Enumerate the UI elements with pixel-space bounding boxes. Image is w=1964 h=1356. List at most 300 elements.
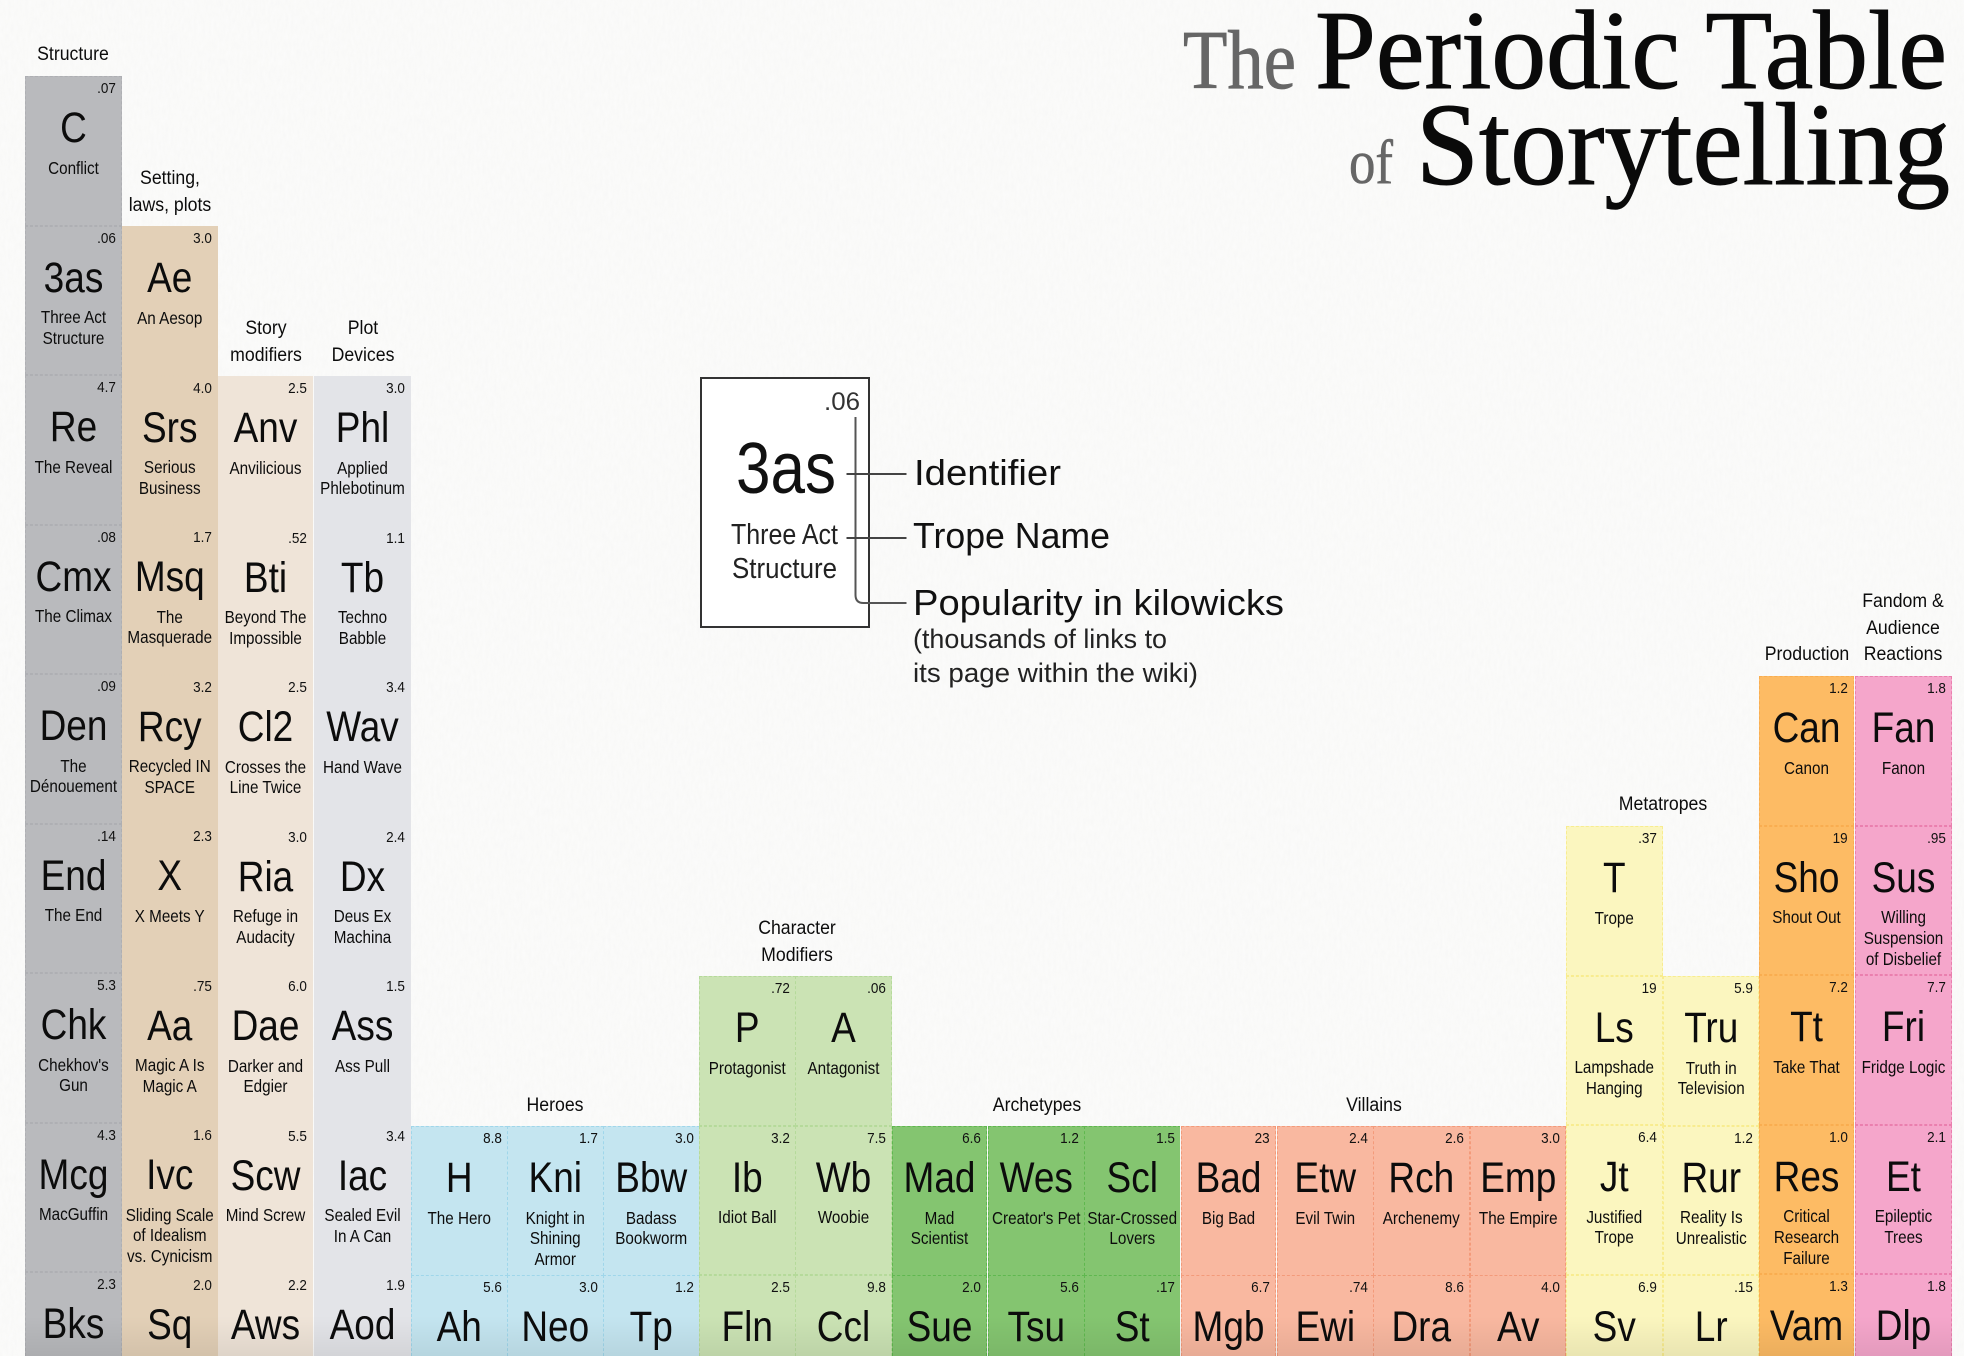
- element: Fln: 2.5: [771, 1279, 790, 1296]
- element: Critical Research Failure: 1.0: [1829, 1128, 1848, 1146]
- element: Idiot Ball: 3.2: [771, 1130, 790, 1146]
- element: Willing Suspension of Disbelief: [1855, 826, 1952, 975]
- element: Lr: [1662, 1275, 1759, 1356]
- element: The Empire: The Empire: [1478, 1208, 1557, 1228]
- element: Shout Out: Shout Out: [1772, 907, 1841, 927]
- element: MacGuffin: Mcg: [39, 1150, 108, 1198]
- element: Archenemy: [1373, 1126, 1470, 1276]
- element: Sq: Sq: [147, 1300, 192, 1348]
- element: Ah: [411, 1275, 508, 1356]
- heading: Story modifiers: [230, 318, 302, 366]
- element: Dlp: Dlp: [1876, 1302, 1931, 1350]
- element: An Aesop: Ae: [147, 254, 192, 302]
- element: Fridge Logic: Fridge Logic: [1862, 1056, 1945, 1076]
- element: Evil Twin: Evil Twin: [1295, 1208, 1355, 1228]
- element: Sliding Scale of Idealism vs. Cynicism: Sliding Scale: [126, 1204, 214, 1224]
- heading: Story modifiers: modifiers: [230, 345, 302, 366]
- element: Trope: [1566, 826, 1662, 976]
- element: Beyond The Impossible: [218, 526, 313, 675]
- element: Aod: Aod: [330, 1301, 395, 1349]
- element: Critical Research Failure: Critical: [1783, 1206, 1830, 1226]
- element: X Meets Y: 2.3: [193, 828, 212, 845]
- element: Hand Wave: Wav: [326, 703, 399, 751]
- heading: Fandom & Audience Reactions: Fandom &: [1862, 591, 1944, 612]
- element: Hand Wave: [314, 675, 411, 824]
- legend: how to read an element: 3as: [736, 429, 836, 509]
- element: Willing Suspension of Disbelief: Sus: [1872, 854, 1935, 902]
- element: The Dénouement: The: [60, 756, 87, 776]
- element: Beyond The Impossible: Impossible: [229, 628, 302, 648]
- element: Big Bad: Bad: [1196, 1154, 1261, 1202]
- element: Ass Pull: 1.5: [386, 978, 405, 995]
- element: Mad Scientist: Scientist: [911, 1228, 968, 1248]
- element: Sue: 2.0: [962, 1279, 981, 1296]
- element: Star-Crossed Lovers: Scl: [1107, 1154, 1158, 1202]
- element: Neo: Neo: [521, 1303, 589, 1351]
- legend: how to read an element: Trope Name: [913, 515, 1110, 556]
- element: Lampshade Hanging: 19: [1641, 980, 1656, 996]
- panel: Heroes group: [411, 1126, 699, 1356]
- element: Beyond The Impossible: Beyond The: [225, 607, 306, 627]
- element: Truth in Television: Truth in: [1685, 1058, 1736, 1078]
- element: Anvilicious: [218, 376, 313, 526]
- element: Darker and Edgier: 6.0: [288, 978, 307, 995]
- element: Vam: 1.3: [1829, 1278, 1848, 1295]
- element: Applied Phlebotinum: Phlebotinum: [320, 478, 405, 498]
- element: The Climax: [25, 524, 122, 674]
- element: Antagonist: A: [831, 1004, 856, 1052]
- element: Ccl: [795, 1275, 892, 1356]
- element: The Hero: H: [446, 1154, 473, 1202]
- element: Take That: 7.2: [1829, 979, 1848, 996]
- element: Ah: 5.6: [483, 1279, 502, 1296]
- heading: Fandom & Audience Reactions: Reactions: [1864, 644, 1942, 665]
- element: Fanon: 1.8: [1927, 680, 1946, 697]
- element: Lampshade Hanging: Ls: [1595, 1004, 1634, 1052]
- element: Mad Scientist: Mad: [925, 1208, 954, 1228]
- element: The Empire: 3.0: [1541, 1130, 1560, 1147]
- element: Woobie: 7.5: [867, 1130, 886, 1146]
- legend: how to read an element: Popularity in kilowicks: [913, 582, 1284, 623]
- legend: how to read an element: Structure: [732, 553, 837, 585]
- element: Tsu: [988, 1275, 1084, 1356]
- element: Canon: Can: [1773, 704, 1840, 752]
- element: Techno Babble: Techno: [338, 607, 387, 627]
- element: Darker and Edgier: Edgier: [243, 1076, 288, 1096]
- element: The Climax: .08: [97, 528, 116, 546]
- element: Justified Trope: Jt: [1600, 1153, 1629, 1201]
- element: Critical Research Failure: Res: [1774, 1152, 1839, 1200]
- legend: how to read an element: its page within the wiki): [913, 658, 1198, 688]
- element: Applied Phlebotinum: Applied: [337, 458, 388, 478]
- element: Dra: 8.6: [1445, 1279, 1464, 1296]
- element: Refuge in Audacity: Refuge in: [233, 906, 298, 926]
- element: Lampshade Hanging: [1566, 976, 1662, 1125]
- element: St: [1084, 1275, 1180, 1356]
- element: Aws: Aws: [231, 1301, 300, 1349]
- element: Recycled IN SPACE: 3.2: [193, 678, 212, 696]
- element: An Aesop: 3.0: [193, 230, 212, 247]
- element: Knight in Shining Armor: Knight in: [526, 1208, 585, 1228]
- element: Reality Is Unrealistic: 1.2: [1734, 1130, 1753, 1146]
- element: Justified Trope: Justified: [1586, 1206, 1642, 1226]
- element: Truth in Television: Television: [1677, 1078, 1744, 1098]
- legend: how to read an element: .06: [824, 388, 860, 416]
- element: Fridge Logic: [1855, 975, 1952, 1124]
- element: Creator's Pet: [988, 1126, 1084, 1276]
- element: Mind Screw: [218, 1124, 313, 1273]
- element: Dlp: 1.8: [1927, 1278, 1946, 1295]
- element: Sealed Evil In A Can: [314, 1124, 411, 1273]
- element: Deus Ex Machina: Deus Ex: [334, 906, 391, 926]
- element: Aod: [314, 1273, 411, 1356]
- element: Deus Ex Machina: [314, 824, 411, 974]
- element: Sv: 6.9: [1638, 1279, 1656, 1296]
- element: Creator's Pet: Wes: [1000, 1154, 1073, 1202]
- element: Ewi: .74: [1349, 1279, 1368, 1296]
- element: Conflict: Conflict: [48, 158, 99, 178]
- element: Bks: Bks: [43, 1300, 104, 1348]
- element: Protagonist: P: [735, 1004, 760, 1052]
- element: Beyond The Impossible: .52: [288, 530, 307, 546]
- element: Critical Research Failure: Research: [1774, 1227, 1839, 1247]
- panel: Villains group: [1181, 1126, 1566, 1356]
- element: Willing Suspension of Disbelief: Willing: [1881, 907, 1926, 927]
- element: Reality Is Unrealistic: Unrealistic: [1675, 1228, 1746, 1248]
- element: Three Act Structure: 3as: [44, 254, 103, 302]
- heading: Character Modifiers: Character: [758, 918, 836, 939]
- heading: Setting, laws, plots: [129, 168, 211, 216]
- element: Serious Business: 4.0: [193, 380, 212, 396]
- element: Epileptic Trees: Et: [1886, 1152, 1921, 1200]
- element: Magic A Is Magic A: Magic A Is: [135, 1055, 204, 1075]
- element: Badass Bookworm: 3.0: [675, 1130, 694, 1147]
- legend: how to read an element: [700, 377, 1284, 688]
- element: Darker and Edgier: Dae: [232, 1002, 299, 1050]
- element: Badass Bookworm: Badass: [626, 1208, 677, 1228]
- element: St: St: [1115, 1303, 1150, 1351]
- heading: Structure: Structure: [37, 44, 109, 65]
- element: Sliding Scale of Idealism vs. Cynicism: [122, 1123, 218, 1272]
- element: Badass Bookworm: [603, 1126, 700, 1276]
- element: Take That: Take That: [1773, 1056, 1840, 1076]
- element: Three Act Structure: .06: [97, 230, 116, 246]
- element: The Climax: Cmx: [35, 552, 112, 600]
- element: Star-Crossed Lovers: [1084, 1126, 1180, 1276]
- element: Justified Trope: [1566, 1125, 1662, 1274]
- element: Magic A Is Magic A: [122, 974, 218, 1123]
- element: Antagonist: Antagonist: [808, 1058, 879, 1078]
- element: Mind Screw: Mind Screw: [226, 1205, 305, 1225]
- panel: Production column: [1759, 676, 1854, 1356]
- element: Deus Ex Machina: Dx: [340, 852, 385, 900]
- panel: Story modifiers column: [218, 376, 313, 1356]
- element: Sue: [892, 1275, 987, 1356]
- element: Truth in Television: Tru: [1684, 1004, 1738, 1052]
- element: Trope: T: [1603, 854, 1626, 902]
- heading: Plot Devices: Devices: [332, 345, 394, 366]
- element: Vam: [1759, 1274, 1854, 1356]
- element: Deus Ex Machina: 2.4: [386, 828, 405, 846]
- element: Serious Business: Srs: [142, 404, 197, 452]
- element: Antagonist: [795, 976, 892, 1126]
- element: Sealed Evil In A Can: In A Can: [334, 1226, 391, 1246]
- element: Av: 4.0: [1541, 1279, 1560, 1296]
- element: X Meets Y: X Meets Y: [135, 906, 205, 926]
- element: Applied Phlebotinum: 3.0: [386, 380, 405, 397]
- heading: Archetypes: Archetypes: [993, 1095, 1081, 1116]
- element: Lampshade Hanging: Lampshade: [1574, 1057, 1654, 1077]
- element: Woobie: [795, 1126, 892, 1275]
- element: An Aesop: An Aesop: [137, 308, 202, 328]
- element: Lampshade Hanging: Hanging: [1586, 1078, 1643, 1098]
- element: Magic A Is Magic A: .75: [193, 978, 212, 994]
- element: Mgb: Mgb: [1193, 1303, 1264, 1351]
- heading: Plot Devices: Plot: [348, 318, 378, 339]
- element: Serious Business: Serious: [144, 457, 196, 477]
- element: Evil Twin: Etw: [1294, 1154, 1356, 1202]
- element: X Meets Y: [122, 824, 218, 974]
- element: Star-Crossed Lovers: 1.5: [1156, 1130, 1174, 1147]
- element: Three Act Structure: [25, 226, 122, 375]
- element: Darker and Edgier: Darker and: [228, 1056, 303, 1076]
- element: Darker and Edgier: [218, 974, 313, 1124]
- element: Protagonist: Protagonist: [709, 1058, 786, 1078]
- element: The Dénouement: Den: [40, 702, 107, 750]
- element: Techno Babble: 1.1: [386, 530, 405, 546]
- element: Ewi: [1277, 1275, 1374, 1356]
- element: Idiot Ball: Ib: [732, 1154, 763, 1202]
- element: Mgb: [1181, 1275, 1276, 1356]
- element: Willing Suspension of Disbelief: .95: [1927, 830, 1946, 846]
- heading: Villains: Villains: [1346, 1095, 1402, 1116]
- element: Archenemy: 2.6: [1445, 1130, 1464, 1147]
- element: Lr: Lr: [1694, 1303, 1727, 1351]
- element: Knight in Shining Armor: Armor: [535, 1249, 576, 1269]
- element: Tsu: 5.6: [1060, 1279, 1078, 1296]
- panel: Fandom and Audience Reactions column: [1855, 676, 1952, 1356]
- element: Idiot Ball: Idiot Ball: [718, 1207, 776, 1227]
- element: Take That: [1759, 975, 1854, 1124]
- element: The Masquerade: Msq: [135, 553, 205, 601]
- element: Trope: Trope: [1595, 908, 1634, 928]
- element: Av: Av: [1497, 1303, 1539, 1351]
- element: Ah: Ah: [437, 1303, 482, 1351]
- element: Serious Business: Business: [139, 478, 201, 498]
- element: Conflict: [25, 76, 122, 226]
- element: Creator's Pet: 1.2: [1060, 1130, 1078, 1147]
- element: Aws: [218, 1273, 313, 1356]
- element: Ccl: Ccl: [817, 1303, 870, 1351]
- element: Fln: [699, 1275, 796, 1356]
- element: The Masquerade: 1.7: [193, 529, 212, 546]
- element: The Hero: [411, 1126, 508, 1276]
- element: Magic A Is Magic A: Magic A: [143, 1076, 197, 1096]
- element: Idiot Ball: [699, 1126, 796, 1275]
- element: Refuge in Audacity: [218, 824, 313, 974]
- element: Dra: [1373, 1275, 1470, 1356]
- element: Techno Babble: [314, 526, 411, 675]
- element: Big Bad: 23: [1255, 1130, 1270, 1147]
- element: Big Bad: Big Bad: [1202, 1208, 1255, 1228]
- element: The Masquerade: Masquerade: [127, 627, 212, 647]
- element: Canon: Canon: [1784, 758, 1829, 778]
- element: Bks: [25, 1272, 122, 1356]
- element: Critical Research Failure: Failure: [1783, 1248, 1830, 1268]
- element: Refuge in Audacity: Audacity: [236, 927, 295, 947]
- element: Badass Bookworm: Bbw: [615, 1154, 687, 1202]
- element: Chekhov's Gun: Chk: [41, 1001, 106, 1049]
- element: Reality Is Unrealistic: Reality Is: [1679, 1207, 1742, 1227]
- element: Sliding Scale of Idealism vs. Cynicism: 1.6: [193, 1127, 212, 1144]
- element: Anvilicious: Anvilicious: [230, 458, 301, 478]
- element: MacGuffin: 4.3: [97, 1126, 116, 1144]
- element: Lr: .15: [1734, 1279, 1753, 1296]
- element: Sliding Scale of Idealism vs. Cynicism: Ivc: [146, 1151, 193, 1199]
- element: Sv: [1566, 1275, 1662, 1356]
- element: Evil Twin: 2.4: [1349, 1130, 1368, 1147]
- element: Fridge Logic: Fri: [1882, 1003, 1925, 1051]
- element: Vam: Vam: [1770, 1302, 1843, 1350]
- element: Tp: 1.2: [675, 1279, 694, 1296]
- element: Mad Scientist: Mad: [904, 1154, 975, 1202]
- element: Crosses the Line Twice: Line Twice: [230, 777, 301, 797]
- element: Anvilicious: 2.5: [288, 380, 307, 397]
- element: Willing Suspension of Disbelief: Suspension: [1864, 928, 1943, 948]
- element: Antagonist: .06: [867, 980, 886, 997]
- element: Fln: Fln: [722, 1303, 773, 1351]
- element: St: .17: [1156, 1279, 1174, 1296]
- element: The Hero: The Hero: [428, 1208, 491, 1228]
- element: Three Act Structure: Structure: [43, 328, 104, 348]
- element: Ass Pull: [314, 974, 411, 1124]
- heading: Fandom & Audience Reactions: [1862, 591, 1944, 665]
- element: The End: [25, 824, 122, 973]
- element: Conflict: .07: [97, 80, 116, 97]
- element: The Reveal: The Reveal: [35, 456, 112, 476]
- element: Archenemy: Rch: [1388, 1154, 1454, 1202]
- element: Av: [1470, 1275, 1566, 1356]
- element: Reality Is Unrealistic: [1662, 1126, 1759, 1275]
- element: Mad Scientist: [892, 1126, 987, 1276]
- element: Shout Out: [1759, 826, 1854, 975]
- element: An Aesop: [122, 226, 218, 376]
- element: The Empire: [1470, 1126, 1566, 1276]
- element: Star-Crossed Lovers: Star-Crossed: [1087, 1208, 1177, 1228]
- element: Refuge in Audacity: 3.0: [288, 828, 307, 846]
- element: Woobie: Woobie: [818, 1207, 869, 1227]
- element: Truth in Television: 5.9: [1734, 980, 1753, 997]
- element: Tp: Tp: [630, 1303, 673, 1351]
- element: The Reveal: [25, 375, 122, 524]
- element: Fanon: Fanon: [1882, 758, 1925, 778]
- element: Recycled IN SPACE: Rcy: [138, 702, 202, 750]
- element: MacGuffin: MacGuffin: [39, 1204, 108, 1224]
- element: Ass Pull: Ass: [332, 1002, 393, 1050]
- element: Fanon: [1855, 676, 1952, 826]
- element: Shout Out: Sho: [1774, 854, 1839, 902]
- element: The End: .14: [97, 828, 116, 844]
- element: Chekhov's Gun: Chekhov's: [38, 1054, 109, 1074]
- element: Sq: 2.0: [193, 1276, 212, 1294]
- element: The Masquerade: The: [157, 606, 183, 626]
- element: The Reveal: Re: [50, 403, 97, 451]
- element: The Masquerade: [122, 525, 218, 674]
- element: The Dénouement: .09: [97, 678, 116, 695]
- element: Mgb: 6.7: [1251, 1279, 1270, 1296]
- element: The Reveal: 4.7: [97, 379, 116, 396]
- element: Refuge in Audacity: Ria: [238, 852, 293, 900]
- element: Chekhov's Gun: 5.3: [97, 977, 116, 994]
- element: Canon: 1.2: [1829, 680, 1848, 697]
- element: Ccl: 9.8: [867, 1279, 886, 1296]
- panel: Metatropes group: [1566, 826, 1759, 1356]
- element: Applied Phlebotinum: [314, 376, 411, 526]
- element: The End: The End: [45, 905, 102, 925]
- element: Sliding Scale of Idealism vs. Cynicism: vs. Cynicism: [127, 1246, 212, 1266]
- legend: how to read an element: (thousands of links to: [913, 624, 1167, 654]
- element: Serious Business: [122, 376, 218, 525]
- element: Epileptic Trees: Epileptic: [1875, 1206, 1932, 1226]
- element: X Meets Y: X: [157, 852, 182, 900]
- title: of: [1349, 129, 1393, 197]
- heading: Metatropes: Metatropes: [1619, 794, 1707, 815]
- element: Badass Bookworm: Bookworm: [615, 1228, 687, 1248]
- element: Chekhov's Gun: [25, 973, 122, 1122]
- element: Big Bad: [1181, 1126, 1276, 1276]
- element: Epileptic Trees: 2.1: [1927, 1128, 1946, 1146]
- element: Fridge Logic: 7.7: [1927, 979, 1946, 996]
- element: Techno Babble: Tb: [341, 554, 384, 602]
- element: Sliding Scale of Idealism vs. Cynicism: of Idealism: [133, 1225, 207, 1245]
- element: Woobie: Wb: [816, 1154, 871, 1202]
- panel: Setting, laws, plots column: [122, 226, 218, 1356]
- element: Bks: 2.3: [97, 1276, 116, 1293]
- element: Chekhov's Gun: Gun: [59, 1075, 88, 1095]
- element: Crosses the Line Twice: Crosses the: [225, 756, 306, 776]
- element: Justified Trope: 6.4: [1638, 1129, 1656, 1146]
- element: The Dénouement: Dénouement: [30, 776, 117, 796]
- element: Tp: [603, 1275, 700, 1356]
- element: Justified Trope: Trope: [1595, 1227, 1634, 1247]
- element: Aws: 2.2: [288, 1277, 307, 1294]
- panel: Structure column: [25, 76, 122, 1356]
- element: Crosses the Line Twice: Cl2: [238, 703, 293, 751]
- element: Hand Wave: 3.4: [386, 679, 405, 696]
- element: Recycled IN SPACE: [122, 674, 218, 824]
- element: Reality Is Unrealistic: Rur: [1681, 1154, 1741, 1202]
- element: Ewi: Ewi: [1295, 1303, 1355, 1351]
- element: Recycled IN SPACE: Recycled IN: [129, 756, 211, 776]
- element: Ass Pull: Ass Pull: [335, 1056, 390, 1076]
- element: Tsu: Tsu: [1007, 1303, 1065, 1351]
- title: [1183, 0, 1950, 210]
- element: Take That: Tt: [1790, 1003, 1823, 1051]
- element: The Hero: 8.8: [483, 1130, 502, 1147]
- element: Sv: Sv: [1593, 1303, 1636, 1351]
- heading: Character Modifiers: [758, 918, 836, 966]
- element: Trope: .37: [1638, 830, 1656, 847]
- element: Conflict: C: [60, 104, 87, 152]
- heading: Production: Production: [1765, 644, 1849, 665]
- element: Deus Ex Machina: Machina: [334, 927, 391, 947]
- element: Dra: Dra: [1391, 1303, 1451, 1351]
- element: Mind Screw: Scw: [231, 1152, 300, 1200]
- element: Hand Wave: Hand Wave: [323, 756, 402, 776]
- element: Knight in Shining Armor: Shining: [530, 1228, 581, 1248]
- element: Neo: [507, 1275, 604, 1356]
- element: Dlp: [1855, 1274, 1952, 1356]
